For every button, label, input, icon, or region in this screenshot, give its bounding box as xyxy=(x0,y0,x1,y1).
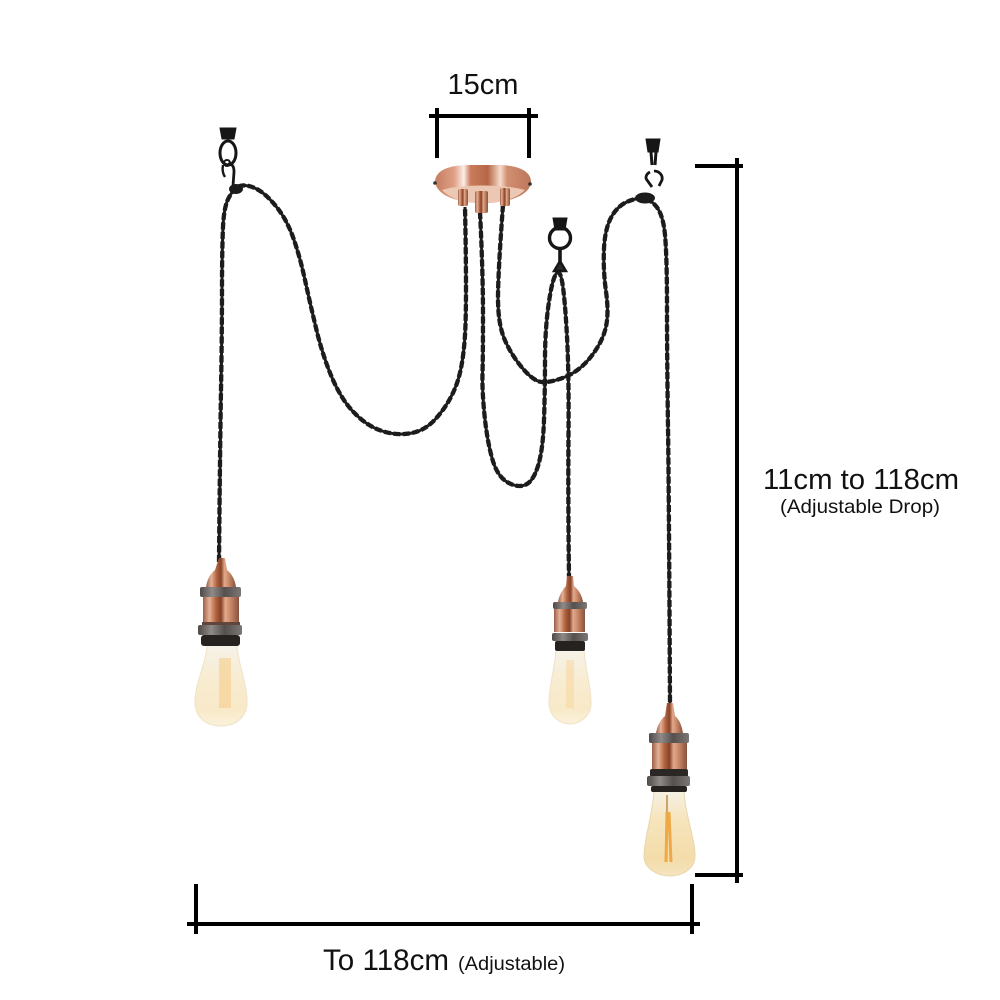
hook: right ceiling hook xyxy=(635,139,662,204)
label: span measurement: To 118cm xyxy=(323,944,449,977)
hook: left ceiling hook xyxy=(220,128,243,194)
hook: middle ceiling hook xyxy=(550,218,570,271)
lamp: middle bulb holder and bulb xyxy=(549,576,591,724)
ceiling rose xyxy=(433,165,532,213)
label: adjustable note: (Adjustable) xyxy=(458,954,565,975)
label: 15cm: 15cm xyxy=(448,69,518,101)
dimension: 15cm width bracket xyxy=(429,108,538,158)
cable: middle pendant xyxy=(480,212,569,578)
dimension: adjustable drop bracket xyxy=(695,158,743,883)
rose port: right xyxy=(500,188,510,206)
cable: left pendant xyxy=(219,185,466,562)
rose port: centre xyxy=(475,191,488,213)
lamp: left bulb holder and bulb xyxy=(195,558,247,726)
dimension: horizontal span bracket xyxy=(187,884,700,934)
lamp: right bulb holder and bulb xyxy=(644,703,695,876)
rose port: left xyxy=(458,189,468,206)
label: adjustable drop note: (Adjustable Drop) xyxy=(780,496,940,518)
label: drop measurement: 11cm to 118cm xyxy=(763,464,959,496)
cable: right pendant xyxy=(498,199,670,706)
